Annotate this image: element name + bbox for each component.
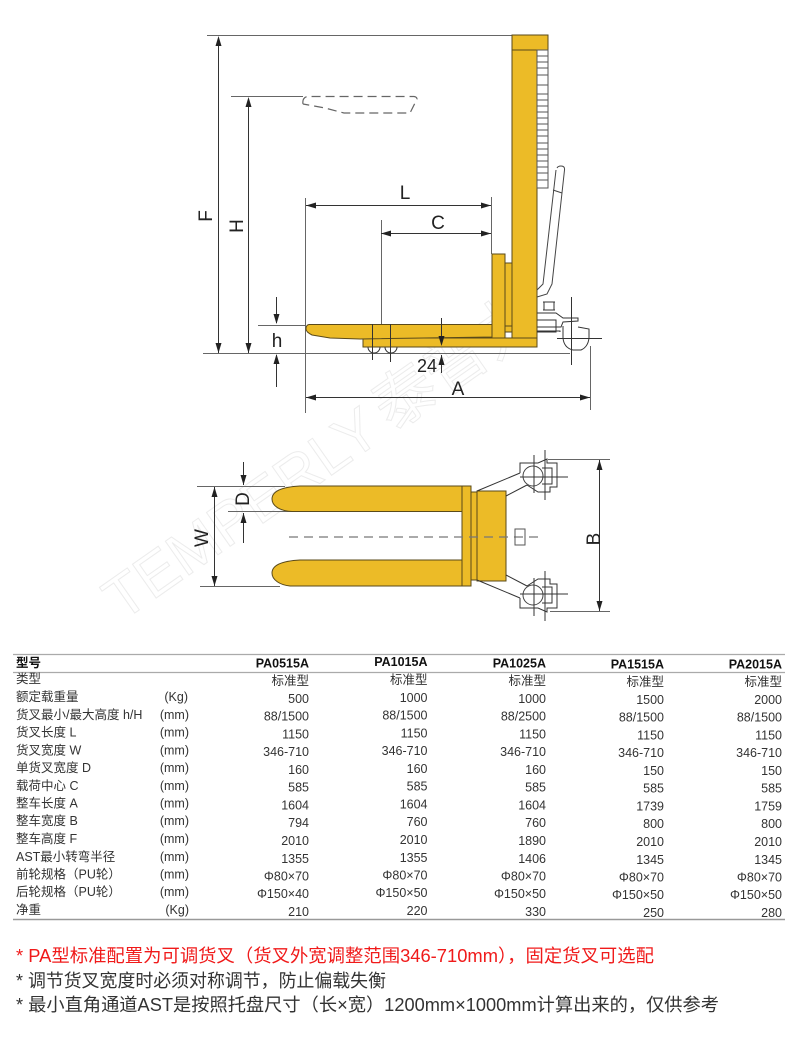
- column PA0515A: 1150: [282, 728, 309, 742]
- column PA2015A: Φ150×50: [730, 888, 782, 902]
- column PA1025A: 330: [525, 905, 546, 919]
- dimension B: [584, 460, 605, 611]
- column PA1025A: Φ150×50: [494, 887, 546, 901]
- dimension L: L: [400, 183, 410, 204]
- table header row: PA1025A: [493, 656, 546, 670]
- table header row: 型号: [16, 656, 41, 670]
- dimension F: F: [196, 210, 217, 222]
- parameter labels: 整车高度 F: [16, 831, 77, 846]
- column PA1515A: 1739: [636, 800, 664, 814]
- column PA0515A: 1355: [281, 852, 309, 866]
- column PA1025A: 760: [525, 816, 546, 830]
- column PA1015A: 1604: [400, 798, 428, 812]
- column PA2015A: 2000: [754, 693, 782, 707]
- units: (mm): [160, 726, 189, 740]
- units: (Kg): [164, 690, 188, 704]
- dimension A: A: [452, 379, 465, 400]
- parameter labels: AST最小转弯半径: [16, 849, 115, 864]
- specification table: [13, 654, 785, 920]
- parameter labels: 后轮规格（PU轮）: [16, 884, 121, 899]
- column PA1015A: 760: [407, 815, 428, 829]
- dimension H: H: [227, 219, 248, 233]
- parameter labels: 载荷中心 C: [16, 778, 79, 793]
- table header row: PA1515A: [611, 658, 664, 672]
- column PA0515A: 88/1500: [264, 710, 309, 724]
- column PA0515A: 585: [288, 780, 309, 794]
- dashed raised fork: [303, 96, 417, 113]
- column PA1015A: 220: [407, 904, 428, 918]
- column PA0515A: 标准型: [271, 674, 309, 688]
- units: (mm): [160, 796, 189, 810]
- column PA0515A: 1604: [281, 798, 309, 812]
- dimension W: [192, 487, 218, 586]
- dimension 24: [417, 318, 444, 376]
- watermark: TEMPERLY: [91, 394, 392, 633]
- extension lines: [197, 460, 610, 612]
- table header row: [16, 655, 782, 672]
- units: (mm): [160, 779, 189, 793]
- upper wheel assembly: [477, 450, 568, 500]
- column PA1025A: [494, 674, 546, 919]
- rear wheel assembly: [537, 297, 602, 365]
- parameter labels: 净重: [16, 902, 41, 917]
- parameter labels: 单货叉宽度 D: [16, 760, 91, 775]
- column PA1515A: 1500: [636, 693, 664, 707]
- table header row: PA1015A: [374, 655, 428, 669]
- column PA1515A: 150: [643, 764, 664, 778]
- column PA1025A: Φ80×70: [501, 870, 546, 884]
- notes: [16, 946, 719, 1015]
- carriage and body: [462, 486, 506, 586]
- units: (mm): [160, 744, 189, 758]
- column PA2015A: [730, 675, 782, 920]
- units: [160, 690, 189, 917]
- column PA1515A: 1345: [636, 853, 664, 867]
- column PA1015A: 标准型: [390, 673, 428, 687]
- column PA1515A: 585: [643, 782, 664, 796]
- units: (mm): [160, 850, 189, 864]
- column PA0515A: [257, 674, 309, 919]
- dimension F: [196, 36, 222, 353]
- units: (mm): [160, 885, 189, 899]
- column PA1025A: 585: [525, 780, 546, 794]
- mast: [512, 35, 548, 347]
- column PA1515A: 250: [643, 906, 664, 920]
- units: (mm): [160, 832, 189, 846]
- column PA1025A: 1150: [519, 728, 546, 742]
- dimension H: [227, 97, 252, 353]
- dimension h: h: [272, 331, 282, 352]
- column PA0515A: 500: [288, 692, 309, 706]
- dimension B: B: [584, 533, 605, 545]
- column PA1015A: 1355: [400, 851, 428, 865]
- parameter labels: 货叉最小/最大高度 h/H: [16, 707, 142, 722]
- column PA1025A: 1604: [518, 798, 546, 812]
- dimension W: W: [192, 529, 213, 547]
- watermark: 泰普力: [360, 280, 552, 443]
- column PA0515A: Φ80×70: [264, 870, 309, 884]
- parameter labels: 前轮规格（PU轮）: [16, 866, 121, 882]
- column PA1015A: 1150: [401, 726, 428, 740]
- units: (mm): [160, 814, 189, 828]
- column PA1015A: 1000: [400, 691, 428, 705]
- parameter labels: 整车宽度 B: [16, 813, 78, 828]
- column PA1025A: 1890: [518, 834, 546, 848]
- units: (Kg): [165, 903, 189, 917]
- handle: [537, 166, 565, 297]
- column PA0515A: 160: [288, 763, 309, 777]
- column PA0515A: 210: [288, 905, 309, 919]
- front wheels: [368, 324, 397, 362]
- column PA1515A: Φ80×70: [619, 870, 664, 884]
- dimension C: C: [431, 213, 445, 234]
- units: (mm): [160, 761, 189, 775]
- watermark: [91, 280, 552, 633]
- column PA1515A: Φ150×50: [612, 888, 664, 902]
- column PA1515A: 800: [643, 817, 664, 831]
- dimension A: [306, 379, 590, 400]
- parameter labels: [16, 672, 142, 917]
- column PA1515A: 88/1500: [619, 710, 664, 724]
- note: symmetric adjustment: * 调节货叉宽度时必须对称调节，防止偏载失衡: [16, 971, 386, 991]
- column PA2015A: Φ80×70: [737, 870, 782, 884]
- column PA1025A: 1406: [518, 852, 546, 866]
- column PA1015A: Φ150×50: [375, 886, 428, 900]
- table header row: PA0515A: [256, 656, 309, 670]
- units: (mm): [160, 868, 189, 882]
- parameter labels: 货叉宽度 W: [16, 742, 81, 758]
- column PA2015A: 1150: [755, 728, 782, 742]
- parameter labels: 整车长度 A: [16, 796, 78, 810]
- center line: [289, 529, 542, 545]
- dimension h: [272, 297, 282, 387]
- column PA2015A: 1345: [754, 853, 782, 867]
- column PA1515A: 346-710: [618, 746, 664, 760]
- dimension D: [233, 462, 254, 543]
- column PA1025A: 346-710: [500, 745, 546, 759]
- note: red standard configuration: * PA型标准配置为可调货叉（货叉外宽调整范围346-710mm），固定货叉可选配: [16, 946, 654, 966]
- column PA1515A: 标准型: [626, 675, 664, 689]
- dimension C: [381, 213, 491, 236]
- column PA1015A: Φ80×70: [382, 868, 428, 882]
- parameter labels: 货叉长度 L: [16, 724, 76, 740]
- column PA2015A: 585: [761, 782, 782, 796]
- dimension 24: 24: [417, 356, 437, 376]
- column PA2015A: 标准型: [744, 675, 782, 689]
- column PA0515A: Φ150×40: [257, 887, 309, 901]
- column PA0515A: 346-710: [263, 745, 309, 759]
- pallet fork and carriage: [306, 254, 537, 347]
- rack: [537, 50, 548, 188]
- parameter labels: 类型: [16, 672, 41, 686]
- column PA1015A: 160: [407, 762, 428, 776]
- note: AST calculation: * 最小直角通道AST是按照托盘尺寸（长×宽）1200mm×1000mm计算出来的，仅供参考: [16, 995, 719, 1015]
- column PA1025A: 1000: [518, 692, 546, 706]
- side view diagram: [196, 35, 602, 413]
- column PA1015A: 88/1500: [382, 708, 428, 722]
- column PA1015A: 346-710: [382, 744, 428, 758]
- column PA1015A: 2010: [400, 833, 428, 847]
- column PA1025A: 160: [525, 763, 546, 777]
- dimension L: [306, 183, 491, 208]
- lower wheel assembly: [477, 571, 568, 621]
- dimension D: D: [233, 492, 254, 506]
- column PA1515A: [612, 675, 664, 920]
- column PA1515A: 2010: [636, 835, 664, 849]
- column PA2015A: 1759: [754, 800, 782, 814]
- units: (mm): [160, 708, 189, 722]
- column PA1515A: 1150: [637, 728, 664, 742]
- column PA2015A: 2010: [754, 835, 782, 849]
- table header row: PA2015A: [729, 658, 782, 672]
- column PA0515A: 794: [288, 816, 309, 830]
- column PA2015A: 280: [761, 906, 782, 920]
- column PA0515A: 2010: [281, 834, 309, 848]
- column PA1015A: [375, 673, 428, 918]
- column PA1025A: 标准型: [508, 674, 546, 688]
- column PA2015A: 800: [761, 817, 782, 831]
- column PA1015A: 585: [407, 780, 428, 794]
- forks: [272, 486, 462, 586]
- top view diagram: [192, 450, 610, 621]
- column PA2015A: 346-710: [736, 746, 782, 760]
- parameter labels: 额定载重量: [16, 689, 79, 704]
- column PA1025A: 88/2500: [501, 710, 546, 724]
- column PA2015A: 88/1500: [737, 710, 782, 724]
- column PA2015A: 150: [761, 764, 782, 778]
- panel: dimension extension lines: [203, 36, 590, 413]
